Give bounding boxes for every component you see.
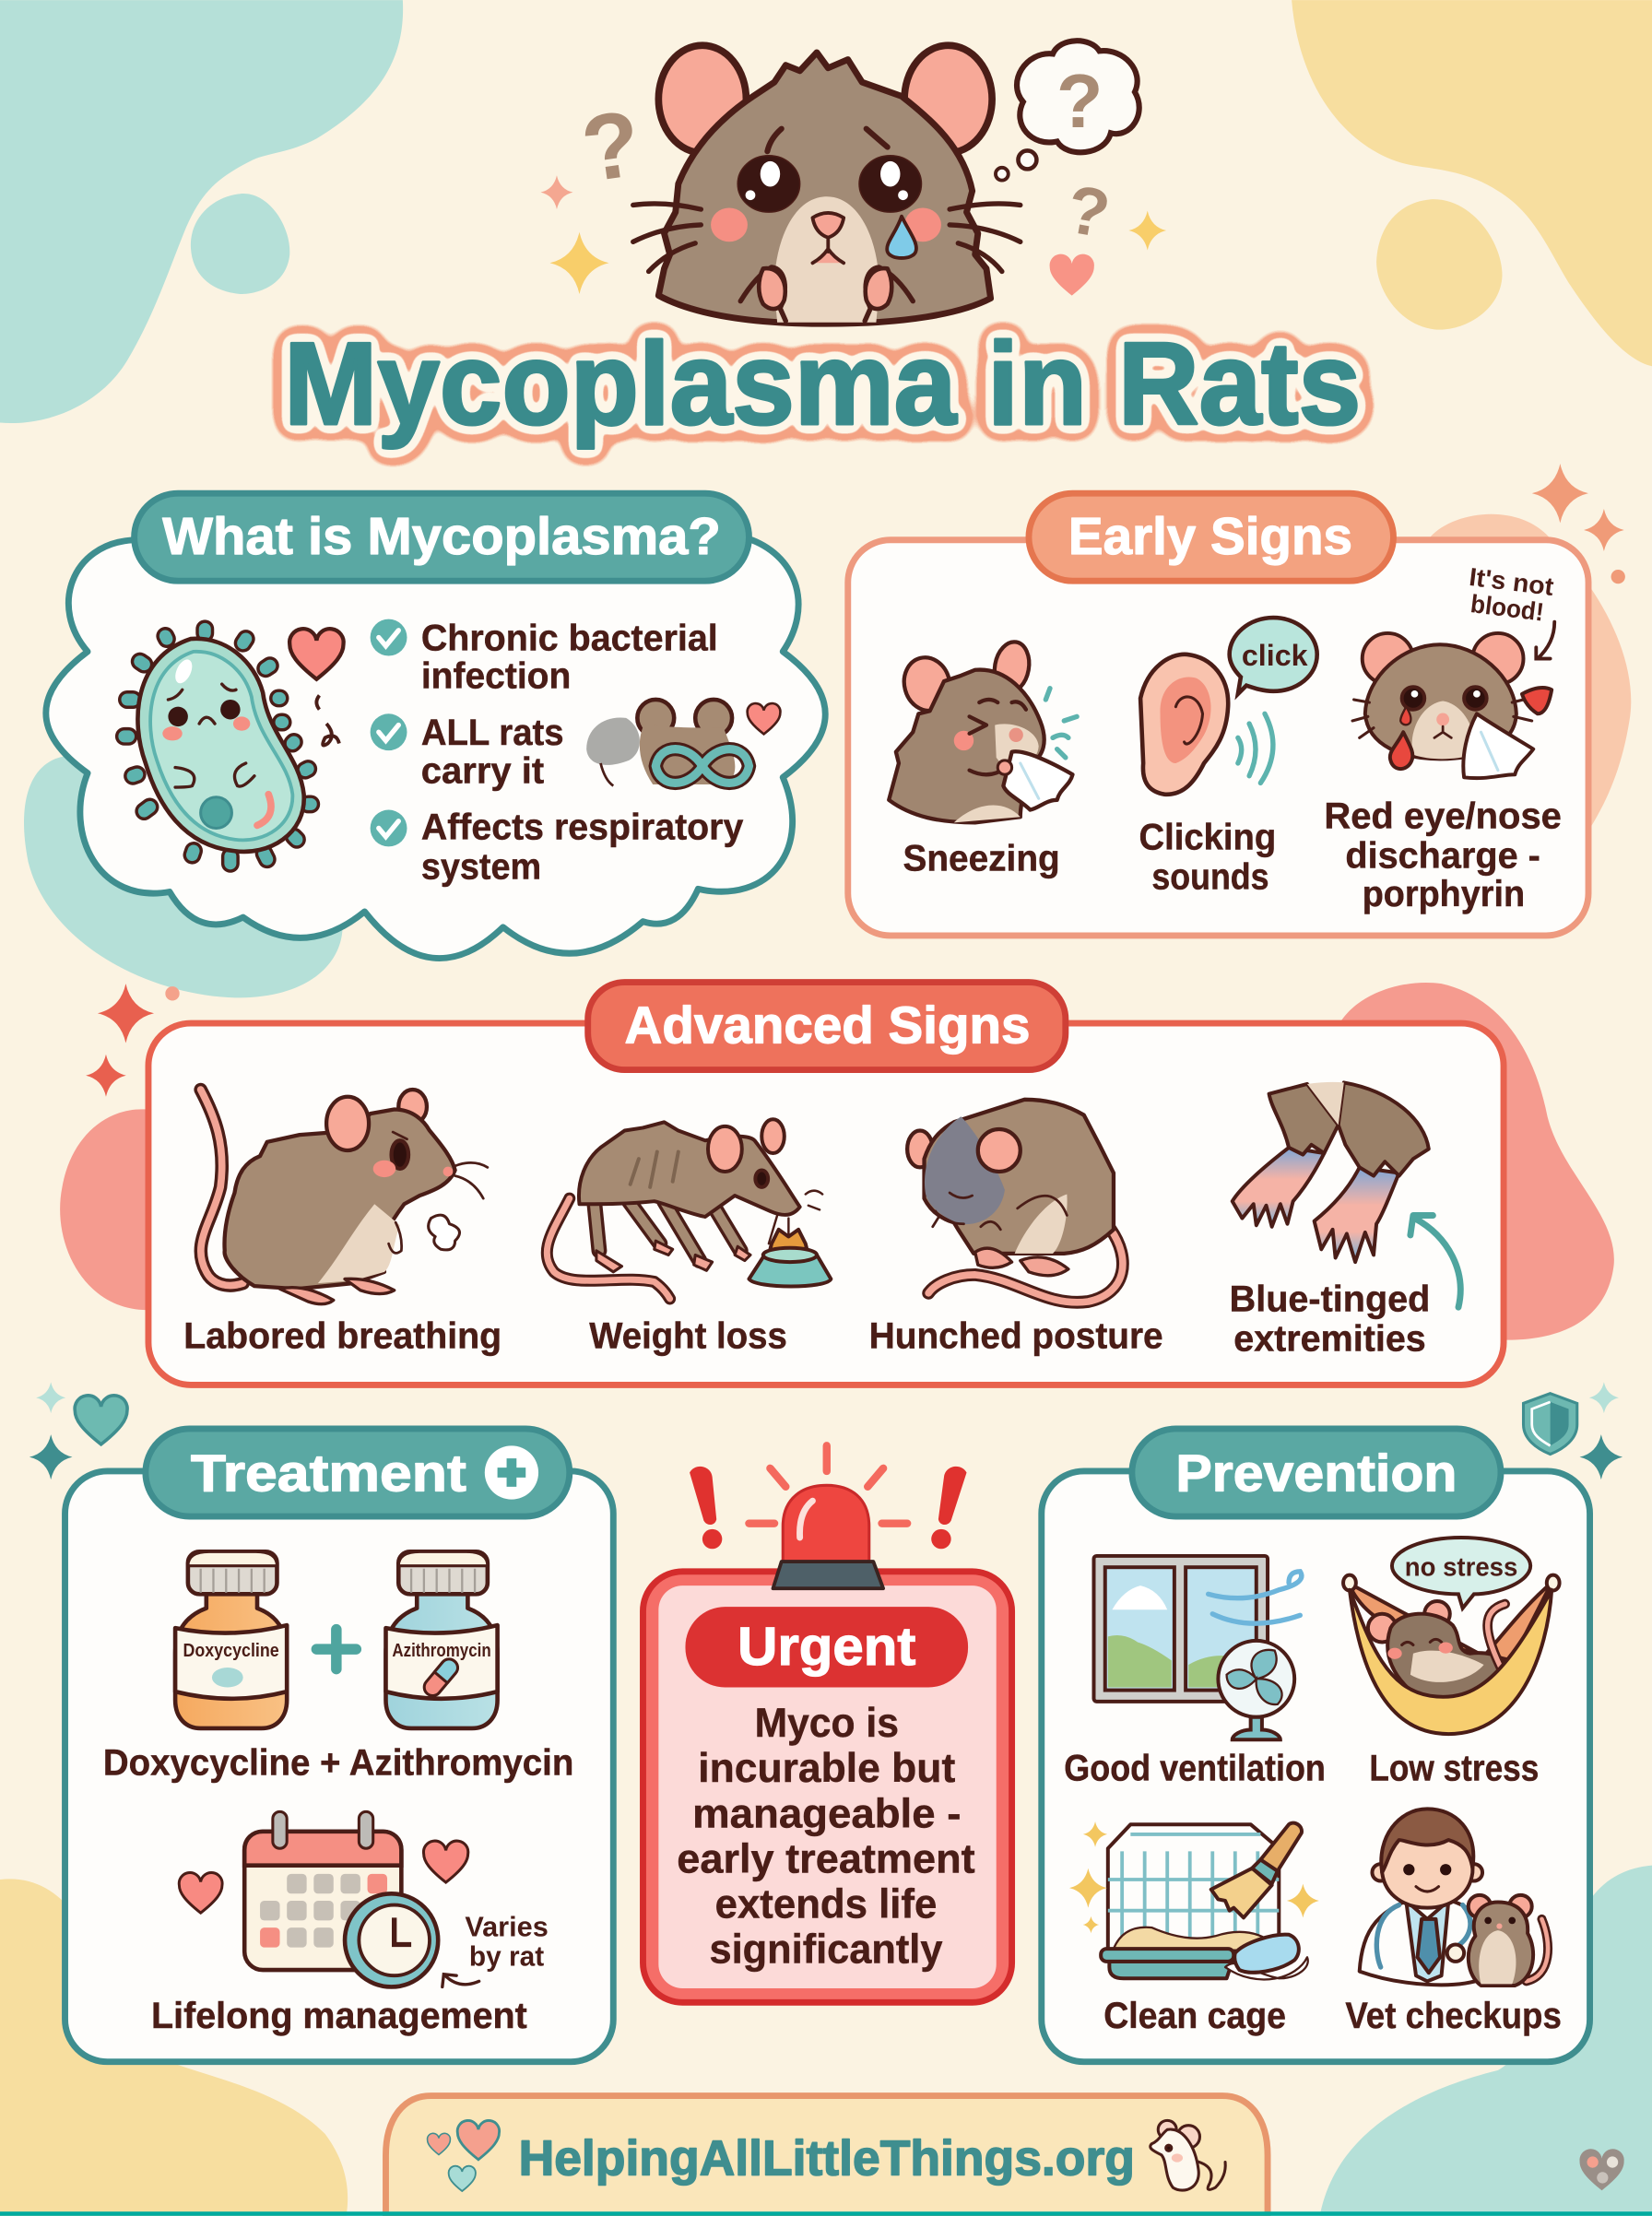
tear: [887, 217, 916, 258]
plus sign: [316, 1630, 356, 1669]
heading pill: Advanced Signs: [625, 996, 1031, 1055]
icon: window and fan: [1093, 1556, 1302, 1739]
hearts: [179, 1841, 468, 1913]
alert card inner: [658, 1585, 997, 1988]
panel: prevention: [1042, 1382, 1622, 2062]
alarm rays and exclamation marks: [690, 1445, 967, 1549]
rat: weight loss: [547, 1119, 822, 1299]
rat: labored breathing: [201, 1090, 488, 1304]
urgent pill: [685, 1607, 968, 1688]
hero: worried rat head: [633, 45, 1021, 324]
bullet: chronic infection: [371, 618, 718, 697]
panel frame: [65, 1471, 613, 2062]
cheeks: [711, 208, 941, 242]
panel: what is mycoplasma: [46, 493, 825, 959]
label: lifelong management: Lifelong management: [151, 1996, 527, 2036]
sparkles: [1532, 464, 1625, 583]
panel frame: [148, 1023, 1504, 1385]
callout: it's not blood: blood!: [1469, 589, 1545, 627]
hearts: [428, 2120, 500, 2191]
label: labored breathing: Labored breathing: [183, 1316, 502, 1357]
rat face with porphyrin: [1352, 633, 1552, 778]
label: red eye nose discharge: porphyrin: [1363, 874, 1525, 914]
bullet: chronic infection: Chronic bacterial: [421, 618, 718, 658]
head body: [658, 53, 991, 324]
heading pill: Early Signs: [1068, 508, 1352, 566]
heading pill: [1132, 1429, 1501, 1516]
icon: clean cage: [1101, 1823, 1308, 1979]
urgent message: significantly: [710, 1927, 943, 1972]
heading pill: Treatment: [191, 1444, 466, 1503]
label: blue-tinged extremities: [1230, 1279, 1430, 1360]
rat: hunched posture: [907, 1100, 1123, 1302]
urgent message: extends life: [715, 1881, 937, 1927]
bullet: all rats: ALL rats: [421, 713, 564, 753]
icon: calendar: [244, 1811, 401, 1970]
urgent message: [677, 1701, 975, 1972]
label: clicking sounds: Clicking: [1139, 817, 1276, 857]
cloud panel shape: [46, 540, 825, 959]
panel frame: [848, 540, 1588, 936]
sneezing rat: [889, 639, 1077, 822]
question glyphs: ?: [1056, 58, 1103, 144]
label: vet checkups: Vet checkups: [1345, 1996, 1562, 2036]
callout: it's not blood: [1468, 562, 1555, 659]
icon: shield: [1524, 1394, 1577, 1455]
heading pill: [588, 983, 1066, 1070]
website url: HelpingAllLittleThings.org: [519, 2130, 1135, 2186]
callout: varies by rat: by rat: [469, 1940, 544, 1972]
label: doxycycline + azithromycin: Doxycycline + Azithromycin: [103, 1743, 573, 1784]
icon: bacterium: [124, 629, 311, 864]
bullet: affects respiratory: Affects respiratory: [421, 807, 743, 848]
brows: [767, 129, 888, 151]
heading pill: [135, 493, 749, 581]
footer panel: [385, 2096, 1268, 2216]
label: good ventilation: Good ventilation: [1064, 1749, 1326, 1789]
bullet: affects respiratory: system: [421, 847, 541, 888]
panel: urgent: [643, 1445, 1012, 2002]
speech bubble: [1230, 618, 1317, 694]
legs with blue extremities: [1233, 1082, 1429, 1262]
label: red eye nose discharge: discharge -: [1345, 835, 1540, 876]
arrow: [1410, 1216, 1460, 1307]
heading pill: [146, 1429, 570, 1516]
sparkles: [1580, 1382, 1622, 1479]
hero sparkles and heart: [541, 175, 1166, 296]
sparkles: [86, 984, 180, 1097]
footer banner: [385, 2096, 1268, 2216]
question marks and thought bubble: [576, 41, 1139, 253]
icon: clock: [345, 1893, 438, 1986]
bottle: doxycycline: [175, 1551, 287, 1728]
decor: left teal heart and sparkles: [30, 1382, 127, 1479]
small squiggle: [316, 695, 339, 746]
label: weight loss: Weight loss: [589, 1316, 787, 1357]
label: sneezing: Sneezing: [903, 838, 1060, 878]
callout: varies by rat: Varies: [465, 1911, 549, 1942]
urgent pill: Urgent: [738, 1617, 915, 1677]
icon: heart: [289, 629, 344, 679]
icon: ear with click: [1140, 618, 1317, 795]
nose and mouth: [812, 213, 844, 263]
icon: ear with click: click: [1242, 639, 1308, 672]
bottle: azithromycin: Azithromycin: [392, 1640, 491, 1661]
alert card: [643, 1572, 1012, 2002]
eyes: [738, 156, 921, 212]
speech bubble: no stress: [1392, 1538, 1530, 1609]
icon: small heart: [748, 703, 780, 734]
label: blue-tinged extremities: Blue-tinged: [1230, 1279, 1430, 1320]
bullet: all rats: [371, 713, 564, 791]
heading pill: [1029, 493, 1393, 581]
bullet: chronic infection: infection: [421, 656, 571, 697]
heading pill: Prevention: [1175, 1444, 1457, 1503]
left ear: [658, 45, 746, 153]
icon: rat silhouette with infinity: [586, 700, 749, 785]
icon: food bowl: [749, 1230, 831, 1287]
panel: early signs: [848, 464, 1625, 936]
paws: [740, 267, 913, 321]
label: clicking sounds: sounds: [1151, 856, 1269, 897]
bottle: doxycycline: Doxycycline: [183, 1640, 279, 1661]
question marks and thought bubble: ?: [576, 91, 646, 202]
sound waves: [1238, 713, 1273, 783]
icon: white mouse: [1150, 2120, 1225, 2190]
urgent message: Myco is: [755, 1701, 899, 1746]
callout: varies by rat: [442, 1911, 549, 1986]
question marks and thought bubble: ?: [1061, 170, 1115, 253]
label: red eye nose discharge: [1324, 796, 1562, 914]
right ear: [904, 45, 992, 153]
bottom teal strip: [0, 2211, 1652, 2216]
label: clean cage: Clean cage: [1103, 1996, 1286, 2036]
label: low stress: Low stress: [1369, 1749, 1539, 1789]
thought bubble: [1017, 41, 1139, 152]
urgent message: incurable but: [698, 1746, 955, 1791]
label: blue-tinged extremities: extremities: [1233, 1319, 1426, 1360]
speech bubble: no stress: no stress: [1405, 1552, 1517, 1582]
urgent message: manageable -: [692, 1791, 961, 1836]
title: Mycoplasma in Rats: [284, 318, 1361, 449]
label: red eye nose discharge: Red eye/nose: [1324, 796, 1562, 836]
cage sparkles: [1069, 1821, 1319, 1933]
whiskers: [633, 204, 1021, 272]
urgent message: early treatment: [677, 1836, 975, 1881]
panel: treatment: [65, 1429, 613, 2062]
panel: advanced signs: [86, 983, 1504, 1385]
icon: vet with rat: [1360, 1809, 1548, 1986]
label: hunched posture: Hunched posture: [869, 1316, 1163, 1357]
panel frame: [1042, 1471, 1590, 2062]
label: clicking sounds: [1139, 817, 1276, 897]
icon: hammock with rat: [1343, 1575, 1560, 1734]
callout: it's not blood: It's not: [1468, 562, 1555, 601]
muzzle and belly: [774, 196, 879, 323]
bullet: affects respiratory: [371, 807, 743, 888]
checklist: [371, 618, 743, 888]
heading pill: What is Mycoplasma?: [162, 508, 721, 566]
small logo heart: [1579, 2149, 1624, 2190]
bullet: all rats: carry it: [421, 750, 544, 791]
bottle: azithromycin: [385, 1551, 498, 1728]
siren: [773, 1485, 883, 1588]
